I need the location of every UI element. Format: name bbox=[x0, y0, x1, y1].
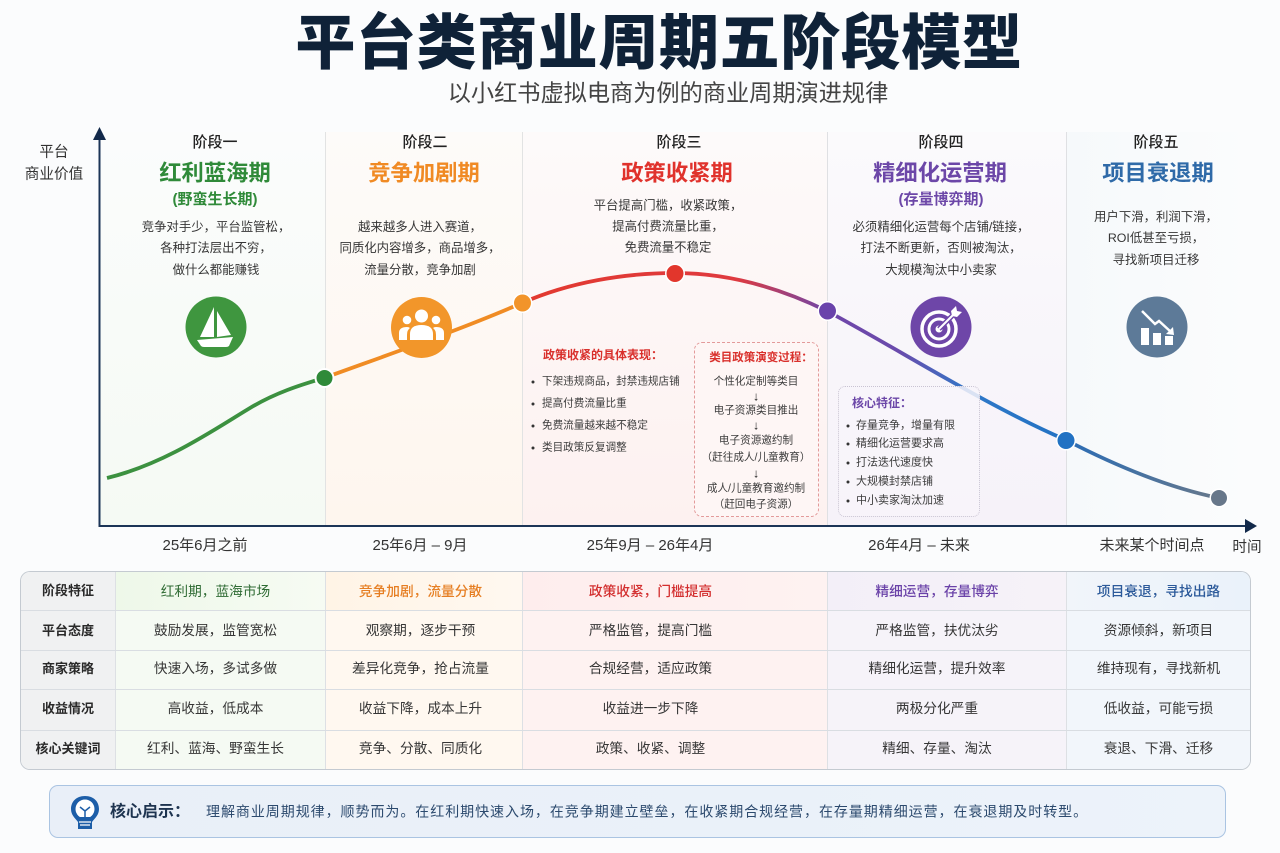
y axis label: 平台 bbox=[39, 144, 69, 160]
time labels: 25年6月 – 9月 bbox=[372, 537, 468, 554]
callout: category policy evolution: ↓ bbox=[753, 466, 759, 480]
row: keywords: 政策、收紧、调整 bbox=[596, 741, 705, 756]
subtitle: 以小红书虚拟电商为例的商业周期演进规律 bbox=[448, 80, 888, 106]
panel: stage five: ROI低甚至亏损， bbox=[1108, 231, 1204, 245]
row: merchant strategy: 维持现有，寻找新机 bbox=[1097, 661, 1220, 676]
row: keywords: 红利、蓝海、野蛮生长 bbox=[147, 741, 284, 756]
panel: stage four: 阶段四 bbox=[918, 134, 964, 151]
icon: group of people bbox=[391, 297, 452, 358]
row: merchant strategy: 合规经营，适应政策 bbox=[589, 661, 712, 676]
panel: stage three bbox=[532, 134, 819, 517]
callout: category policy evolution: 电子资源类目推出 bbox=[714, 405, 798, 417]
panel: stage two: 同质化内容增多，商品增多， bbox=[339, 241, 501, 255]
callout: category policy evolution: （赶往成人/儿童教育） bbox=[702, 452, 810, 464]
row: revenue bbox=[21, 689, 1250, 730]
panel: stage two bbox=[339, 134, 501, 358]
icon: light bulb bbox=[71, 796, 99, 829]
panel: stage four bbox=[838, 134, 1029, 517]
text block: policy tightening details: 免费流量越来越不稳定 bbox=[542, 420, 648, 432]
row: stage characteristics: 精细运营，存量博弈 bbox=[875, 584, 999, 598]
row: merchant strategy: 差异化竞争，抢占流量 bbox=[352, 661, 489, 676]
text block: policy tightening details: 政策收紧的具体表现： bbox=[543, 348, 663, 362]
time labels: 25年6月之前 bbox=[162, 537, 248, 554]
panel backgrounds bbox=[100, 132, 1067, 525]
row: revenue: 收益下降，成本上升 bbox=[359, 701, 482, 716]
callout: category policy evolution bbox=[694, 342, 819, 517]
text block: policy tightening details bbox=[532, 348, 680, 454]
panel: stage three: 阶段三 bbox=[656, 134, 702, 151]
panel: stage five: 用户下滑，利润下滑， bbox=[1094, 210, 1218, 224]
row: keywords: 精细、存量、淘汰 bbox=[882, 741, 992, 756]
callout: core characteristics: 中小卖家淘汰加速 bbox=[856, 494, 944, 506]
lifecycle curve bbox=[106, 264, 1227, 506]
row: platform attitude: 观察期，逐步干预 bbox=[366, 623, 475, 638]
panel: stage three: 提高付费流量比重， bbox=[612, 220, 724, 234]
row: platform attitude bbox=[21, 610, 1250, 650]
panel: stage four: 大规模淘汰中小卖家 bbox=[885, 263, 997, 277]
row: stage characteristics: 政策收紧，门槛提高 bbox=[589, 584, 712, 598]
row: platform attitude: 平台态度 bbox=[42, 622, 94, 638]
callout: category policy evolution: ↓ bbox=[753, 390, 759, 404]
row: merchant strategy: 商家策略 bbox=[42, 660, 94, 676]
row: keywords: 衰退、下滑、迁移 bbox=[1104, 741, 1213, 756]
callout: core insight: 核心启示： bbox=[110, 803, 190, 820]
row: keywords: 核心关键词 bbox=[35, 740, 100, 756]
row: stage characteristics: 阶段特征 bbox=[42, 583, 94, 598]
panel: stage one: 阶段一 bbox=[192, 134, 238, 151]
time labels: 25年9月 – 26年4月 bbox=[587, 537, 713, 554]
row: revenue: 收益情况 bbox=[42, 700, 94, 716]
x axis label: 时间 bbox=[1232, 539, 1262, 555]
callout: core insight bbox=[49, 785, 1226, 838]
panel: stage five: 项目衰退期 bbox=[1102, 161, 1214, 186]
panel: stage three: 政策收紧期 bbox=[621, 161, 733, 186]
row: revenue: 高收益，低成本 bbox=[168, 701, 263, 716]
callout: category policy evolution: 个性化定制等类目 bbox=[714, 376, 798, 388]
callout: core insight: 理解商业周期规律，顺势而为。在红利期快速入场，在竞争期建立壁垒，在收紧期合规经营，在存量期精细运营，在衰退期及时转型。 bbox=[206, 804, 1088, 820]
panel: stage four: (存量博弈期) bbox=[898, 191, 984, 208]
time labels: 26年4月 – 未来 bbox=[868, 537, 970, 554]
row: revenue: 低收益，可能亏损 bbox=[1104, 701, 1213, 716]
panel: stage two: 越来越多人进入赛道， bbox=[358, 220, 482, 234]
time labels bbox=[162, 537, 1205, 554]
row: merchant strategy: 精细化运营，提升效率 bbox=[869, 661, 1005, 676]
icon: declining bar chart bbox=[1126, 296, 1188, 358]
chart axes bbox=[93, 127, 1257, 533]
panel: stage four: 打法不断更新，否则被淘汰， bbox=[860, 241, 1022, 255]
callout: core characteristics bbox=[838, 386, 980, 517]
callout: category policy evolution: 类目政策演变过程： bbox=[709, 352, 813, 364]
callout: category policy evolution: ↓ bbox=[753, 418, 759, 432]
row: merchant strategy: 快速入场，多试多做 bbox=[154, 661, 277, 676]
panel: stage one: 红利蓝海期 bbox=[159, 161, 271, 186]
panel: stage two: 流量分散，竞争加剧 bbox=[364, 263, 476, 277]
row: platform attitude: 鼓励发展，监管宽松 bbox=[154, 623, 277, 638]
y axis label bbox=[25, 144, 83, 182]
callout: core characteristics: 存量竞争，增量有限 bbox=[856, 419, 955, 431]
comparison table bbox=[21, 572, 1250, 769]
row: platform attitude: 资源倾斜，新项目 bbox=[1104, 623, 1213, 638]
icon: target with arrow bbox=[910, 296, 972, 358]
row: stage characteristics: 竞争加剧，流量分散 bbox=[359, 584, 482, 598]
row: platform attitude: 严格监管，提高门槛 bbox=[589, 623, 712, 638]
row: keywords: 竞争、分散、同质化 bbox=[359, 741, 482, 756]
row: stage characteristics: 项目衰退，寻找出路 bbox=[1097, 584, 1220, 598]
panel: stage five bbox=[1094, 134, 1218, 358]
panel: stage three: 平台提高门槛，收紧政策， bbox=[594, 198, 742, 212]
row: stage characteristics bbox=[21, 572, 1250, 610]
row: keywords bbox=[21, 730, 1250, 769]
callout: core characteristics: 打法迭代速度快 bbox=[856, 456, 933, 468]
title: 平台类商业周期五阶段模型 bbox=[295, 10, 1023, 77]
row: merchant strategy bbox=[21, 650, 1250, 689]
panel: stage one: 竞争对手少，平台监管松， bbox=[142, 220, 290, 234]
row: stage characteristics: 红利期，蓝海市场 bbox=[161, 584, 270, 598]
callout: core characteristics: 大规模封禁店铺 bbox=[856, 475, 933, 487]
panel: stage five: 寻找新项目迁移 bbox=[1113, 253, 1199, 267]
panel: stage one: (野蛮生长期) bbox=[172, 191, 258, 208]
callout: core characteristics: 核心特征： bbox=[852, 396, 912, 410]
panel: stage one: 做什么都能赚钱 bbox=[173, 263, 259, 277]
panel: stage two: 阶段二 bbox=[402, 134, 448, 151]
callout: core characteristics: 精细化运营要求高 bbox=[856, 437, 944, 449]
panel: stage one: 各种打法层出不穷， bbox=[160, 241, 272, 255]
y axis label: 商业价值 bbox=[25, 166, 83, 182]
time labels: 未来某个时间点 bbox=[1099, 537, 1205, 554]
panel: stage one bbox=[142, 134, 290, 358]
row: platform attitude: 严格监管，扶优汰劣 bbox=[875, 623, 999, 638]
row: revenue: 收益进一步下降 bbox=[603, 701, 698, 716]
text block: policy tightening details: 提高付费流量比重 bbox=[542, 398, 627, 410]
text block: policy tightening details: 类目政策反复调整 bbox=[542, 442, 627, 454]
panel: stage five: 阶段五 bbox=[1133, 134, 1179, 151]
panel: stage three: 免费流量不稳定 bbox=[625, 240, 711, 254]
callout: category policy evolution: 成人/儿童教育邀约制 bbox=[707, 483, 805, 495]
row: revenue: 两极分化严重 bbox=[896, 701, 978, 716]
panel: stage four: 必须精细化运营每个店铺/链接， bbox=[853, 220, 1029, 234]
text block: policy tightening details: 下架违规商品，封禁违规店铺 bbox=[542, 376, 680, 388]
callout: category policy evolution: （赶回电子资源） bbox=[714, 499, 798, 511]
icon: sailboat bbox=[186, 296, 246, 358]
panel: stage two: 竞争加剧期 bbox=[368, 161, 480, 186]
panel: stage four: 精细化运营期 bbox=[873, 161, 1007, 186]
callout: category policy evolution: 电子资源邀约制 bbox=[719, 435, 793, 447]
